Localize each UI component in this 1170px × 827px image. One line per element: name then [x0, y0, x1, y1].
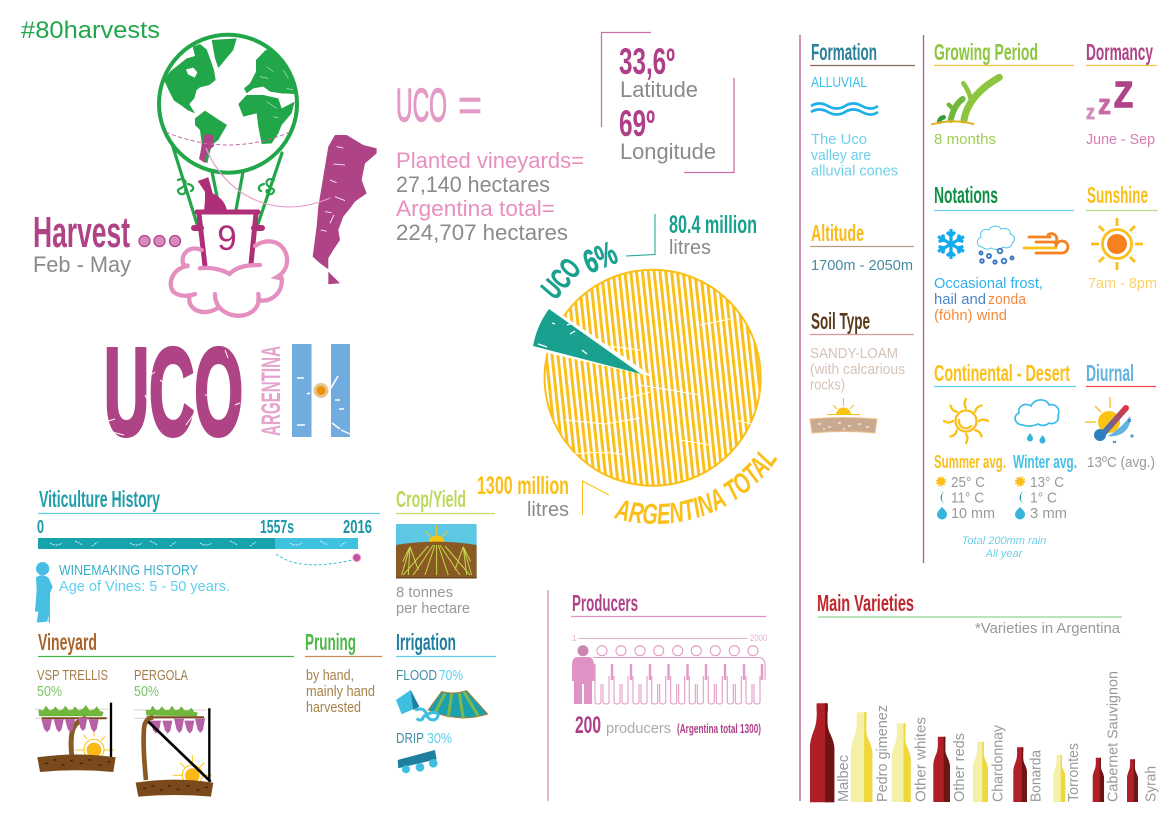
pergola label: 50%: [134, 683, 159, 700]
balloon illustration: globe and wine bucket: [159, 35, 307, 316]
rainfall note: [962, 535, 1046, 560]
timeline labels: 2016: [343, 517, 372, 537]
panel: crop yield: Crop/Yield: [396, 486, 466, 512]
bottle: Chardonnay: [973, 742, 988, 802]
Harvest heading: Harvest: [33, 208, 130, 257]
producers count: (Argentina total 1300): [677, 721, 761, 736]
icon: vineyard rows: [396, 524, 477, 578]
bottle: Other reds: [933, 737, 950, 802]
dashed latitude line: [166, 132, 290, 145]
panel: viticulture history: Viticulture History: [39, 486, 160, 512]
label: Malbec: Malbec: [835, 755, 852, 802]
panel: pruning: mainly hand: [306, 683, 375, 700]
panel: growing period: [932, 39, 1074, 148]
winter averages: [1013, 452, 1077, 522]
yield text: [396, 584, 470, 617]
panel: viticulture history: [35, 486, 380, 623]
notations description: Occasional frost,: [934, 275, 1043, 292]
producers scale: [572, 633, 767, 643]
coordinates panel: [602, 32, 734, 172]
timeline labels: [37, 517, 372, 537]
icon: soil with sun: [810, 398, 877, 433]
label: Syrah: Syrah: [1143, 766, 1160, 802]
icon: drip pipe: [398, 750, 438, 773]
notations description: (föhn) wind: [934, 307, 1007, 324]
icon: bucket: [194, 212, 262, 266]
icon: balloon ropes: [173, 147, 282, 224]
hashtag title: #80harvests: [21, 17, 160, 44]
label: Bonarda: Bonarda: [1028, 749, 1045, 802]
yield text: 8 tonnes: [396, 584, 453, 601]
timeline labels: 0: [37, 517, 44, 537]
icon: snowflake: [936, 229, 966, 259]
icon: growing vine: [932, 77, 999, 124]
drip label: DRIP: [396, 730, 424, 747]
icon: flood bucket and field: [396, 690, 488, 720]
hectares text block: 224,707 hectares: [396, 220, 568, 245]
bottle: Malbec: [810, 703, 834, 802]
panel: altitude: Altitude: [811, 220, 864, 246]
map of Argentina: [206, 135, 377, 284]
panel: diurnal: 13ºC (avg.): [1087, 454, 1155, 471]
hectares text block: Planted vineyards=: [396, 148, 584, 173]
icon: zonda wind: [1024, 234, 1068, 253]
ARGENTINA vertical label: ARGENTINA: [256, 346, 286, 436]
icon: pergola vine: [134, 706, 213, 797]
panel: altitude: 1700m - 2050m: [811, 257, 913, 274]
winemaking text: Age of Vines: 5 - 50 years.: [59, 578, 230, 595]
harvest months: Feb - May: [33, 252, 131, 277]
panel: formation: Formation: [811, 39, 877, 65]
notations description: zonda: [988, 291, 1027, 308]
icon: sun: [1091, 218, 1143, 270]
icon: summer sun: [944, 399, 988, 443]
dashed connector: [276, 554, 352, 565]
pie slice: Argentina total: [545, 270, 761, 486]
pergola label: [134, 667, 188, 700]
UCO letters: UCO: [104, 324, 243, 462]
panel: irrigation: Irrigation: [396, 629, 456, 655]
winemaking text: [59, 562, 230, 595]
winter averages: Winter avg.: [1013, 452, 1077, 472]
callout: 1300 million litres: litres: [527, 499, 569, 521]
icon: sleeping zzz: [1086, 74, 1133, 124]
panel: pruning: by hand,: [306, 667, 354, 684]
panel: dormancy: [1086, 39, 1157, 148]
bottle: Pedro gimenez: [851, 712, 872, 802]
UCO 6% label: 6%: [578, 234, 622, 280]
icon: globe: [159, 35, 307, 173]
panel: producers: Producers: [572, 590, 638, 616]
panel: continental desert climate: [934, 360, 1077, 560]
panel: vineyard: Vineyard: [38, 629, 97, 655]
summer averages: Summer avg.: [934, 452, 1006, 472]
label: Chardonnay: Chardonnay: [990, 725, 1007, 802]
summer averages: 11° C: [951, 490, 984, 506]
panel: sunshine: 7am - 8pm: [1088, 275, 1157, 292]
panel: altitude: [810, 220, 914, 274]
pictogram: filled producer: [572, 645, 594, 704]
drip label: 30%: [427, 730, 452, 747]
panel: vineyard: [35, 629, 294, 797]
bottle: Torrontes: [1053, 755, 1065, 802]
panel: crop yield: [396, 486, 495, 617]
icon: hail cloud: [977, 226, 1014, 264]
panel: diurnal: [1085, 360, 1156, 471]
icon: cloud: [171, 241, 287, 316]
Argentine flag: [292, 344, 350, 437]
panel: soil type: rocks): [810, 376, 845, 394]
bottle: Other whites: [892, 723, 911, 802]
callout: 1300 million litres: 1300 million: [477, 472, 569, 500]
pictogram: outline producers: [593, 646, 765, 704]
Argentina total arc label: ARGENTINA TOTAL: [614, 451, 778, 524]
flood label: FLOOD: [396, 667, 437, 684]
panel: pruning: [305, 629, 382, 716]
UCO Argentina logo: [104, 324, 350, 462]
icon: old woman with cane: [35, 562, 53, 623]
callout: 1300 million litres: [477, 472, 609, 521]
icon: sleeping zzz: Z: [1114, 74, 1133, 115]
VSP trellis label: VSP TRELLIS: [37, 667, 108, 684]
bottle: Bonarda: [1013, 747, 1027, 802]
winter averages: 1° C: [1030, 490, 1057, 506]
panel: pruning: Pruning: [305, 629, 356, 655]
yield text: per hectare: [396, 600, 470, 617]
label: Cabernet Sauvignon: Cabernet Sauvignon: [1105, 671, 1122, 802]
icon: water waves: [811, 104, 878, 114]
icon: trellis vine: [35, 703, 116, 772]
notations description: [934, 275, 1043, 324]
flood label: 70%: [439, 667, 463, 684]
producers count: producers: [606, 720, 671, 737]
icon: sleeping zzz: z: [1086, 102, 1095, 124]
UCO equals heading: =: [458, 79, 482, 131]
winter averages: 13° C: [1030, 474, 1064, 491]
callout: 80.4 million litres: [626, 211, 757, 259]
label: Pedro gimenez: Pedro gimenez: [874, 705, 891, 802]
formation description: alluvial cones: [811, 162, 898, 180]
longitude: 69º: [619, 103, 655, 144]
winemaking text: WINEMAKING HISTORY: [59, 562, 198, 579]
hectares text block: [396, 148, 584, 245]
pie slice: Uco 6%: [533, 309, 641, 374]
coordinates panel: Latitude: [620, 77, 698, 102]
bucket number: 9: [217, 219, 237, 258]
pie chart: Uco share of Argentina: [533, 234, 778, 524]
bottle chart: [810, 671, 1160, 802]
icon: sleeping zzz: z: [1098, 89, 1111, 121]
panel: producers: [571, 590, 767, 739]
label: Other reds: Other reds: [951, 733, 968, 802]
panel: soil type: [810, 308, 914, 433]
winter averages: 3 mm: [1030, 505, 1067, 522]
coordinates panel: Longitude: [620, 139, 716, 164]
panel: diurnal: Diurnal: [1086, 360, 1134, 386]
formation description: The Uco: [811, 131, 867, 148]
VSP trellis label: 50%: [37, 683, 62, 700]
UCO equals heading: UCO: [396, 79, 447, 131]
VSP trellis label: [37, 667, 108, 700]
panel: main varieties: Main Varieties: [817, 590, 914, 616]
panel: main varieties: *Varieties in Argentina: [975, 620, 1121, 637]
panel: irrigation: [396, 629, 496, 773]
label: Other whites: Other whites: [913, 717, 930, 802]
panel: main varieties: [810, 590, 1160, 802]
panel: growing period: 8 months: [934, 131, 996, 148]
connector from Uco to map: [206, 148, 330, 207]
icon: wine bottle: [198, 177, 227, 212]
pergola label: PERGOLA: [134, 667, 188, 684]
panel: sunshine: [1086, 182, 1158, 292]
summer averages: [934, 452, 1006, 522]
hectares text block: 27,140 hectares: [396, 172, 550, 197]
panel: pruning: harvested: [306, 699, 361, 716]
panel: continental desert climate: Continental - Desert: [934, 360, 1070, 386]
panel: soil type: Soil Type: [811, 308, 870, 334]
timeline bar: [38, 538, 358, 549]
rainfall note: All year: [985, 548, 1024, 560]
summer averages: 25° C: [951, 474, 985, 491]
latitude: 33,6º: [619, 41, 675, 82]
panel: formation: ALLUVIAL: [811, 74, 867, 91]
callout: 80.4 million litres: litres: [669, 237, 711, 259]
producers scale: 2000: [750, 633, 767, 643]
panel: soil type: SANDY-LOAM: [810, 345, 898, 362]
rainfall note: Total 200mm rain: [962, 535, 1046, 547]
label: Torrontes: Torrontes: [1065, 743, 1082, 802]
summer averages: 10 mm: [951, 505, 995, 522]
producers divider: [547, 590, 549, 801]
panel: growing period: Growing Period: [934, 39, 1038, 65]
icon: thermometer with sun and moon: [1085, 397, 1134, 443]
panel: dormancy: June - Sep: [1086, 131, 1155, 148]
timeline end dot: [353, 554, 361, 562]
producers count: 200: [575, 712, 601, 739]
bottle: Syrah: [1127, 759, 1138, 802]
harvest dots: [139, 236, 180, 246]
bottle: Cabernet Sauvignon: [1093, 758, 1104, 802]
icon: winter cloud with rain: [1015, 400, 1059, 444]
notations description: hail and: [934, 291, 986, 308]
column dividers: [800, 35, 924, 801]
timeline labels: 1557s: [260, 517, 294, 537]
formation description: valley are: [811, 147, 871, 164]
formation description: [811, 131, 898, 180]
producers scale: 1: [572, 634, 577, 643]
panel: formation: [810, 39, 915, 180]
panel: notations: Notations: [934, 182, 998, 208]
panel: soil type: (with calcarious: [810, 361, 905, 378]
callout: 80.4 million litres: 80.4 million: [669, 211, 757, 239]
producers count: [575, 712, 761, 739]
UCO 6% label: UCO: [535, 252, 588, 306]
drip label: [396, 730, 452, 747]
panel: notations: [934, 182, 1074, 324]
hectares text block: Argentina total=: [396, 196, 555, 221]
